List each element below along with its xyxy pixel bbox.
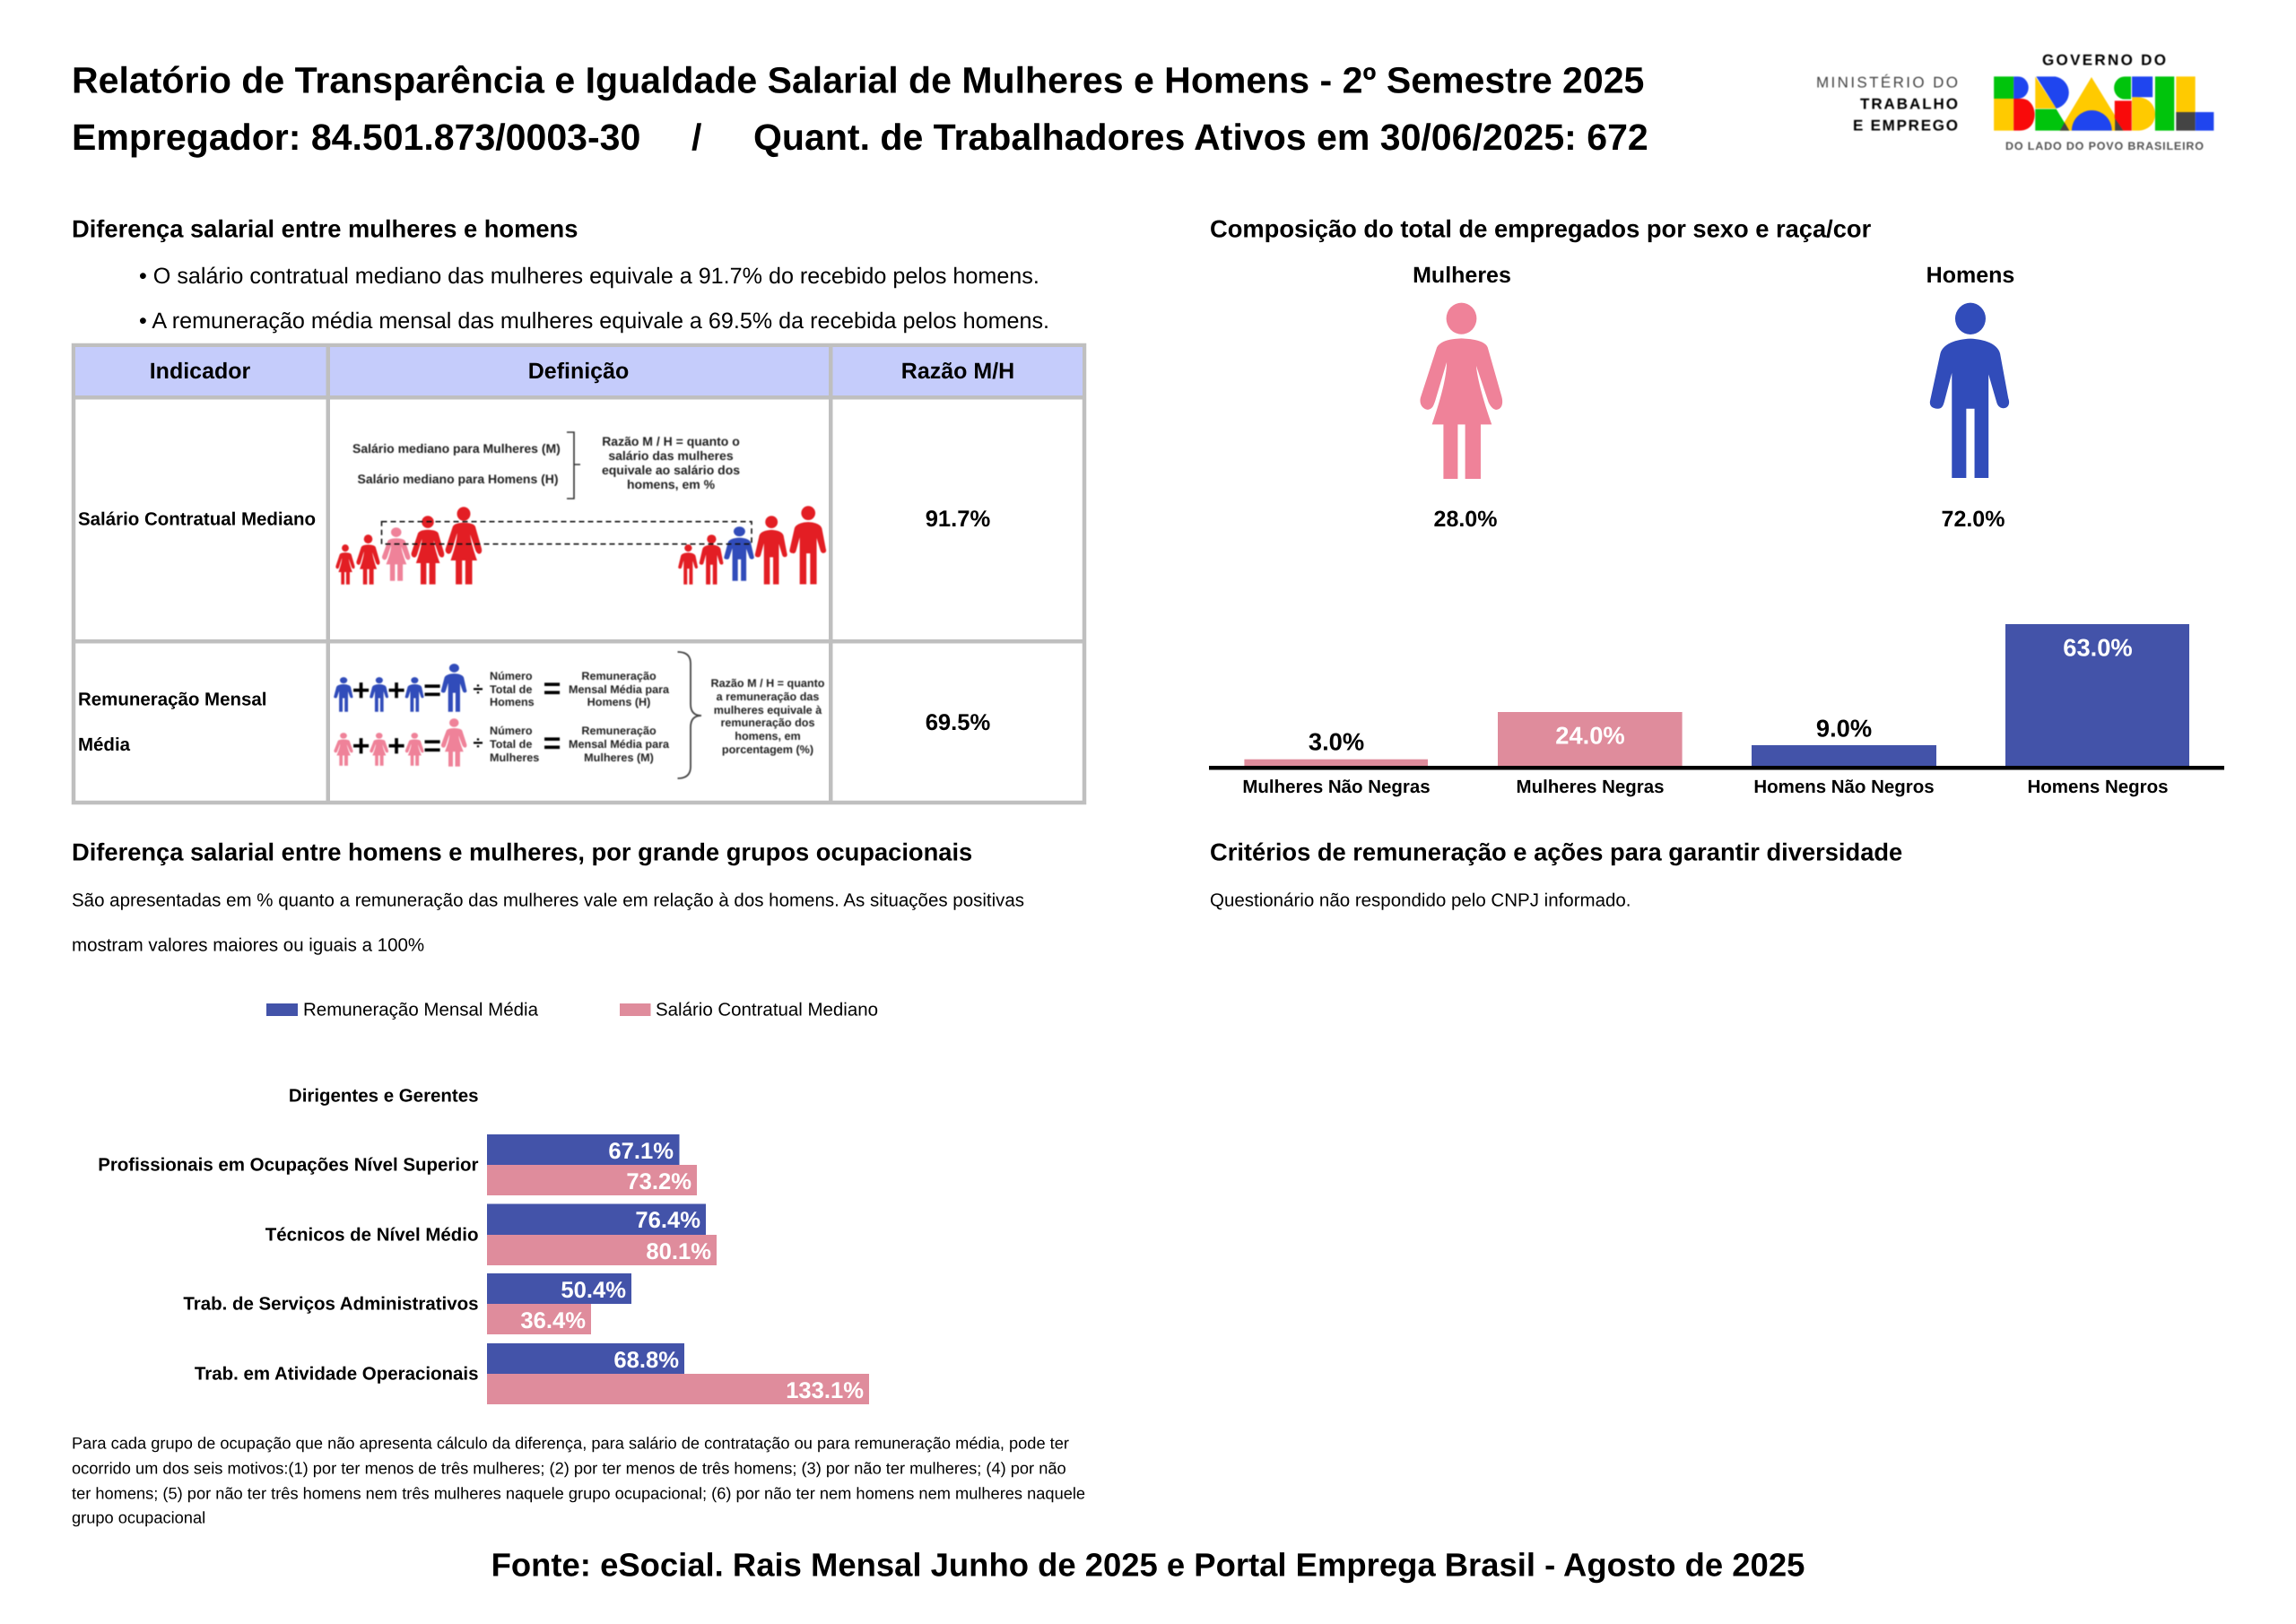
diagram: remuneração média: + <box>387 729 405 763</box>
icon: woman <box>1420 303 1502 479</box>
legend: Remuneração Mensal Média <box>303 999 539 1020</box>
text block: explicação: mostram valores maiores ou iguais a 100% <box>72 934 424 956</box>
title: / <box>691 117 701 158</box>
diagram: remuneração média: porcentagem (%) <box>722 743 813 756</box>
diagram: remuneração média: Homens <box>490 696 535 708</box>
row: remuneração mensal média: Remuneração Mensal <box>78 689 266 710</box>
footnote: ocorrido um dos seis motivos:(1) por ter menos de três mulheres; (2) por ter menos de três homens; (3) por não ter mulheres; (4) por não <box>72 1458 1066 1478</box>
table header row: Indicador <box>150 359 251 384</box>
diagram: remuneração média: Homens (H) <box>587 696 650 708</box>
diagram: remuneração média: + <box>387 673 405 708</box>
bar chart: sexo e raça: Mulheres Negras <box>1517 777 1664 797</box>
bar chart: grupos ocupacionais: 80.1% <box>646 1239 711 1264</box>
legend: Salário Contratual Mediano <box>656 999 878 1020</box>
row: salário contratual mediano: Salário Contratual Mediano <box>78 509 316 529</box>
bullet text block <box>139 264 1049 334</box>
table header row <box>150 359 1014 384</box>
bar chart: grupos ocupacionais: Profissionais em Ocupações Nível Superior <box>98 1155 479 1175</box>
row: salário contratual mediano: 91.7% <box>926 507 991 532</box>
diagram: remuneração média: Mensal Média para <box>569 738 670 751</box>
diagram: remuneração média: = <box>423 673 441 708</box>
row: remuneração mensal média: 69.5% <box>926 710 991 735</box>
diagram: remuneração média: + <box>352 673 370 708</box>
footnote <box>72 1433 1085 1526</box>
title: Quant. de Trabalhadores Ativos em 30/06/2025: 672 <box>753 117 1648 158</box>
bar chart: sexo e raça: 9.0% <box>1816 714 1872 743</box>
bar chart: sexo e raça: Homens Negros <box>2028 777 2168 797</box>
row: remuneração mensal média: Média <box>78 734 131 755</box>
diagram: salário mediano: Razão M / H = quanto o <box>602 434 740 448</box>
row: remuneração mensal média <box>78 689 991 755</box>
diagram: remuneração média: Total de <box>490 683 532 696</box>
diagram: remuneração média: = <box>544 726 561 760</box>
diagram: remuneração média: + <box>352 729 370 763</box>
logo: ministério do trabalho e emprego: E EMPREGO <box>1853 117 1958 135</box>
title: Relatório de Transparência e Igualdade Salarial de Mulheres e Homens - 2º Semestre 2025 <box>72 59 1644 100</box>
bullet text block: • A remuneração média mensal das mulheres equivale a 69.5% da recebida pelos homens. <box>139 308 1049 334</box>
diagram: remuneração média: = <box>544 672 561 706</box>
logo: governo do brasil: DO LADO DO POVO BRASILEIRO <box>2005 140 2204 152</box>
heading: critérios: Critérios de remuneração e ações para garantir diversidade <box>1210 838 1902 866</box>
bullet text block: • O salário contratual mediano das mulheres equivale a 91.7% do recebido pelos homens. <box>139 264 1039 289</box>
panel: mulheres <box>1413 263 1511 532</box>
row: salário contratual mediano <box>78 507 991 532</box>
panel: mulheres: Mulheres <box>1413 263 1511 288</box>
diagram: salário mediano <box>335 432 826 585</box>
panel: mulheres: 28.0% <box>1434 507 1497 532</box>
logo: ministério do trabalho e emprego: TRABALHO <box>1860 95 1958 113</box>
diagram: remuneração média: Remuneração <box>581 725 657 737</box>
panel: homens: 72.0% <box>1942 507 2005 532</box>
bar chart: sexo e raça: 24.0% <box>1555 721 1625 750</box>
text block: explicação <box>72 890 1024 956</box>
logo: governo do brasil <box>1994 52 2213 152</box>
logo: ministério do trabalho e emprego: MINISTÉRIO DO <box>1816 74 1958 91</box>
diagram: remuneração média: a remuneração das <box>717 690 819 703</box>
bar chart: grupos ocupacionais: 76.4% <box>635 1208 700 1233</box>
source line: Fonte: eSocial. Rais Mensal Junho de 2025 e Portal Emprega Brasil - Agosto de 2025 <box>491 1546 1805 1584</box>
logo: governo do brasil: GOVERNO DO <box>2042 52 2166 68</box>
footnote: grupo ocupacional <box>72 1508 205 1526</box>
diagram: remuneração média: remuneração dos <box>721 716 814 729</box>
diagram: salário mediano: equivale ao salário dos <box>602 463 740 477</box>
title: Empregador: 84.501.873/0003-30 <box>72 117 640 158</box>
bar chart: grupos ocupacionais: Dirigentes e Gerentes <box>289 1085 479 1107</box>
text: questionário: Questionário não respondido pelo CNPJ informado. <box>1210 890 1631 911</box>
bar chart: grupos ocupacionais: Técnicos de Nível Médio <box>265 1225 479 1245</box>
diagram: salário mediano: Salário mediano para Mulheres (M) <box>352 441 561 456</box>
icon: man <box>1930 303 2009 478</box>
bar chart: sexo e raça: 63.0% <box>2063 633 2133 662</box>
bar chart: grupos ocupacionais: 67.1% <box>608 1139 674 1164</box>
panel: homens <box>1926 263 2014 532</box>
heading: diferença salarial: Diferença salarial entre mulheres e homens <box>72 215 578 242</box>
diagram: salário mediano: salário das mulheres <box>608 448 734 463</box>
diagram: remuneração média: Mensal Média para <box>569 683 670 696</box>
bar chart: grupos ocupacionais: Trab. de Serviços Administrativos <box>183 1293 479 1315</box>
footnote: ter homens; (5) por não ter três homens nem três mulheres naquele grupo ocupacional; (6) por não ter nem homens nem mulheres naquele <box>72 1483 1085 1503</box>
bar chart: grupos ocupacionais: Trab. em Atividade Operacionais <box>195 1363 479 1385</box>
bar chart: sexo e raça <box>1209 624 2224 797</box>
diagram: remuneração média: Total de <box>490 738 532 751</box>
bar chart: grupos ocupacionais: 68.8% <box>613 1348 679 1373</box>
bar chart: sexo e raça: 3.0% <box>1309 728 1364 755</box>
diagram: remuneração média: Remuneração <box>581 670 657 682</box>
panel: homens: Homens <box>1926 263 2014 288</box>
bar chart: grupos ocupacionais: 50.4% <box>561 1278 626 1303</box>
diagram: remuneração média: ÷ <box>474 734 483 753</box>
bar chart: grupos ocupacionais: 73.2% <box>626 1169 691 1194</box>
diagram: remuneração média <box>334 652 825 778</box>
diagram: remuneração média: homens, em <box>735 730 801 743</box>
table header row: Razão M/H <box>901 359 1014 384</box>
panel: indicator table <box>72 343 1086 804</box>
footnote: Para cada grupo de ocupação que não apresenta cálculo da diferença, para salário de contratação ou para remuneração média, pode ter <box>72 1433 1069 1453</box>
table header row: Definição <box>528 359 629 384</box>
diagram: remuneração média: Número <box>490 725 533 737</box>
logo: ministério do trabalho e emprego <box>1816 74 1958 135</box>
diagram: remuneração média: mulheres equivale à <box>714 704 822 716</box>
heading: grandes grupos ocupacionais: Diferença salarial entre homens e mulheres, por grande grupos ocupacionais <box>72 838 972 866</box>
bar chart: sexo e raça: Homens Não Negros <box>1753 777 1935 797</box>
diagram: remuneração média: ÷ <box>474 680 483 699</box>
bar chart: grupos ocupacionais <box>98 1085 869 1404</box>
diagram: remuneração média: Mulheres (M) <box>584 751 654 764</box>
diagram: remuneração média: Número <box>490 670 533 682</box>
title <box>72 59 1648 158</box>
diagram: remuneração média: = <box>423 729 441 763</box>
text block: explicação: São apresentadas em % quanto a remuneração das mulheres vale em relação à dos homens. As situações positivas <box>72 890 1024 911</box>
diagram: remuneração média: Razão M / H = quanto <box>710 677 825 690</box>
diagram: remuneração média: Mulheres <box>490 751 539 764</box>
legend <box>266 999 878 1020</box>
heading: composição: Composição do total de empregados por sexo e raça/cor <box>1210 215 1872 242</box>
diagram: salário mediano: homens, em % <box>627 477 716 491</box>
bar chart: grupos ocupacionais: 36.4% <box>520 1308 586 1333</box>
bar chart: grupos ocupacionais: 133.1% <box>786 1378 864 1403</box>
bar chart: sexo e raça: Mulheres Não Negras <box>1242 777 1431 797</box>
diagram: salário mediano: Salário mediano para Homens (H) <box>357 472 559 486</box>
